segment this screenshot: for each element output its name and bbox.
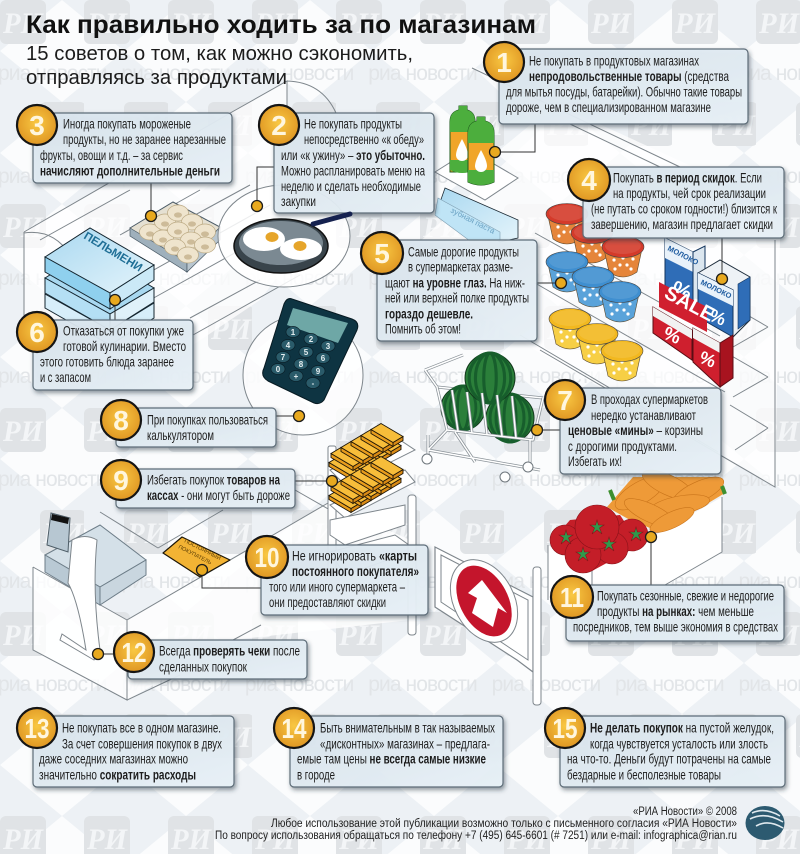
- panel: tip 9: кассах - они могут быть дороже: [147, 487, 290, 503]
- subtitle: отправляясь за продуктами: [26, 66, 287, 89]
- icon: RIA Novosti globe logo: [746, 806, 784, 840]
- panel: tip 7: Избегать их!: [568, 453, 622, 469]
- panel: tip 3: начисляют дополнительные деньги: [40, 162, 220, 178]
- panel: tip 14: емые там цены не всегда самые низкие: [297, 750, 486, 766]
- icon: loyalty card: ПОСТОЯННЫЙ: [183, 537, 222, 562]
- icon: calculator: 3: [326, 342, 331, 351]
- panel: tip 11: [551, 576, 784, 641]
- panel: tip 13: [17, 708, 234, 787]
- panel: tip 4: Покупать в период скидок. Если: [613, 170, 762, 186]
- panel: tip 6: этого готовить блюда заранее: [40, 354, 174, 370]
- panel: tip 13: даже соседних магазинах можно: [39, 750, 188, 766]
- panel: tip 3: продукты, но не заранее нарезанные: [63, 131, 226, 147]
- panel: tip 1: 1: [496, 47, 512, 78]
- panel: tip 8: [101, 400, 276, 447]
- panel: tip 1: Не покупать в продуктовых магазинах: [529, 52, 699, 68]
- icon: cash register with receipt: [45, 513, 146, 660]
- panel: tip 14: [274, 708, 503, 787]
- icon: milk cartons and sale boxes: [653, 238, 750, 387]
- panel: tip 2: неделю и сделать необходимые: [281, 178, 421, 194]
- panel: tip 6: и с запасом: [40, 369, 91, 385]
- icon: frying pan with eggs: [234, 219, 328, 273]
- circle behind calculator: [243, 315, 363, 435]
- icon: calculator: 2: [309, 335, 314, 344]
- footer credits: [215, 806, 737, 842]
- panel: tip 7: нередко устанавливают: [591, 407, 696, 423]
- icon: calculator: 9: [316, 367, 321, 376]
- icon: milk cartons and sale boxes: МОЛОКО: [666, 244, 700, 267]
- title: Как правильно ходить за по магазинам: [26, 11, 536, 39]
- panel: tip 11: 11: [560, 582, 584, 613]
- connector dots: [92, 124, 728, 660]
- footer credits: Любое использование этой публикации возможно только с письменного согласия «РИА Новости»: [271, 818, 737, 830]
- icon: calculator: 0: [276, 365, 281, 374]
- panel: tip 2: закупки: [281, 193, 316, 209]
- panel: tip 10: Не игнорировать «карты: [292, 548, 417, 564]
- icon: milk cartons and sale boxes: %: [668, 275, 696, 306]
- panel: tip 12: сделанных покупок: [159, 658, 248, 674]
- panel: tip 2: Можно распланировать меню на: [281, 162, 425, 178]
- panel: tip 12: [114, 632, 307, 679]
- panel: tip 15: 15: [552, 713, 578, 744]
- shelf under bottles: [435, 150, 518, 200]
- panel: tip 3: 3: [29, 110, 45, 141]
- panel: tip 8: калькулятором: [147, 427, 214, 443]
- icon: milk cartons and sale boxes: %: [697, 347, 719, 372]
- icon: bottles: [450, 106, 494, 185]
- panel: tip 3: [17, 105, 232, 183]
- icon: loyalty card: ПОКУПАТЕЛЬ: [177, 544, 213, 566]
- panel: tip 15: бездарные и бесполезные товары: [567, 766, 721, 782]
- panel: tip 5: в супермаркетах разме-: [408, 258, 513, 274]
- panel: tip 10: они предоставляют скидки: [269, 594, 386, 610]
- icon: calculator: 7: [281, 353, 286, 362]
- icon: calculator: 6: [321, 354, 326, 363]
- panel: tip 13: значительно сократить расходы: [39, 766, 196, 782]
- icon: calculator: [263, 299, 358, 404]
- panel: tip 2: непосредственно «к обеду»: [304, 131, 424, 147]
- icon: toothpaste boxes: [435, 188, 518, 242]
- icon: calculator: 4: [286, 341, 291, 350]
- panel: tip 2: Не покупать продукты: [304, 116, 402, 132]
- panel: tip 7: В проходах супермаркетов: [591, 391, 708, 407]
- panel: tip 7: [545, 380, 721, 474]
- panel: tip 14: 14: [282, 713, 307, 744]
- panel: tip 7: ценовые «мины» – корзины: [568, 422, 703, 438]
- panel: tip 10: постоянного покупателя»: [292, 563, 419, 579]
- panel: tip 7: 7: [557, 385, 573, 416]
- icon: calculator: 8: [299, 360, 304, 369]
- panel: tip 10: [246, 536, 428, 615]
- panel: tip 9: 9: [113, 465, 129, 496]
- footer credits: «РИА Новости» © 2008: [633, 806, 737, 818]
- panel: tip 5: Самые дорогие продукты: [408, 244, 519, 260]
- panel: tip 10: того или иного супермаркета –: [269, 578, 405, 594]
- icon: loyalty card: [163, 537, 230, 577]
- panel: tip 14: в городе: [297, 766, 335, 782]
- icon: milk cartons and sale boxes: %: [707, 305, 729, 330]
- panel: tip 7: с дорогими продуктами.: [568, 438, 677, 454]
- panel: tip 1: дороже, чем в специализированном магазине: [506, 99, 711, 115]
- panel: tip 3: фрукты, овощи и т.д. – за сервис: [40, 147, 183, 163]
- subtitle: [26, 42, 413, 89]
- panel: tip 11: продукты на рынках: чем меньше: [597, 603, 754, 619]
- panel: tip 2: или «к ужину» – это убыточно.: [281, 147, 425, 163]
- icon: pelmeni boxes: ПЕЛЬМЕНИ: [81, 230, 144, 274]
- panel: tip 8: При покупках пользоваться: [147, 412, 268, 428]
- panel: tip 2: [259, 105, 434, 213]
- icon: milk cartons and sale boxes: SALE: [661, 282, 718, 326]
- icon: entrance sign with arrow: [408, 495, 541, 705]
- panel: tip 13: 13: [24, 713, 50, 744]
- icon: calculator: -: [312, 379, 315, 388]
- footer credits: По вопросу использования обращаться по телефону +7 (495) 645-6601 (# 7251) или e-mail: infographica@rian.ru: [215, 830, 737, 842]
- panel: tip 2: 2: [271, 110, 287, 141]
- panel: tip 5: гораздо дешевле.: [385, 306, 473, 322]
- panel: tip 5: 5: [374, 238, 390, 269]
- icon: shopping cart with watermelons: [422, 353, 543, 482]
- panel: tip 6: готовой кулинарии. Вместо: [63, 338, 186, 354]
- panel: tip 5: Помнить об этом!: [385, 320, 461, 336]
- icon: calculator: 1: [291, 328, 296, 337]
- panel: tip 6: [17, 312, 193, 390]
- icon: peppers: [607, 464, 728, 537]
- panel: tip 4: [568, 159, 784, 238]
- panel: tip 5: щают на уровне глаз. На ниж-: [385, 274, 525, 290]
- icon: gold bar shelf: [328, 424, 416, 576]
- store outlines: [24, 66, 780, 700]
- panel: tip 5: [361, 232, 537, 341]
- panel: tip 14: Быть внимательным в так называемых: [320, 720, 495, 736]
- icon: tomatoes: [550, 505, 648, 573]
- panel: tip 1: [484, 42, 748, 124]
- panel: tip 9: [101, 460, 295, 508]
- panel: tip 14: «дисконтных» магазинах – предлага-: [320, 736, 490, 752]
- panel: tip 3: Иногда покупать мороженые: [63, 116, 191, 132]
- panel: tip 6: 6: [29, 317, 45, 348]
- icon: calculator: +: [294, 372, 299, 381]
- icon: mushroom tray: [130, 202, 220, 272]
- panel: tip 4: 4: [581, 165, 597, 196]
- panel: tip 9: Избегать покупок товаров на: [147, 472, 280, 488]
- panel: tip 15: [545, 708, 785, 787]
- subtitle: 15 советов о том, как можно сэкономить,: [26, 42, 413, 65]
- panel: tip 5: ней или верхней полке продукты: [385, 290, 529, 306]
- panel: tip 12: Всегда проверять чеки после: [159, 642, 300, 658]
- panel: tip 13: Не покупать все в одном магазине.: [62, 720, 221, 736]
- panel: tip 1: непродовольственные товары (средства: [529, 68, 729, 84]
- panel: tip 8: 8: [113, 405, 129, 436]
- icon: milk cartons and sale boxes: %: [660, 323, 684, 349]
- panel: tip 12: 12: [122, 637, 146, 668]
- icon: yogurt cups: [546, 204, 644, 381]
- icon: pan handle: [313, 214, 350, 224]
- icon: calculator: 5: [304, 348, 309, 357]
- panel: tip 10: 10: [254, 542, 280, 573]
- circle behind pan: [218, 185, 350, 287]
- icon: toothpaste boxes: зубная паста: [449, 206, 497, 236]
- icon: pelmeni boxes: [45, 228, 154, 345]
- panel: tip 6: Отказаться от покупки уже: [63, 322, 184, 338]
- panel: tip 13: За счет совершения покупок в двух: [62, 736, 222, 752]
- icon: milk cartons and sale boxes: МОЛОКО: [699, 278, 733, 301]
